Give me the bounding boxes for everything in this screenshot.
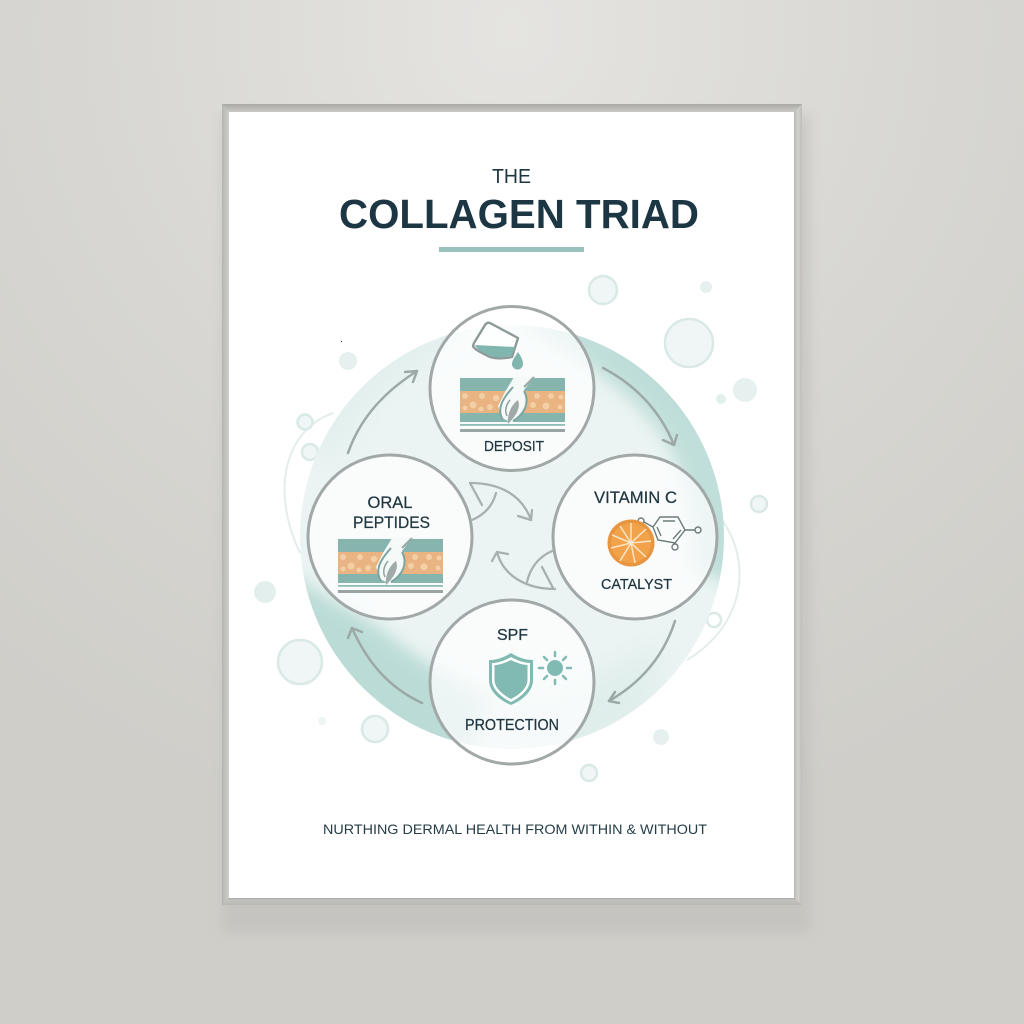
icon: molecule [638,517,701,550]
label: protection: PROTECTION [465,717,559,734]
icon: orange slice [608,520,654,566]
icon: skin cross-section [338,538,443,593]
node: spf [430,600,594,764]
title underline [439,247,584,252]
title: COLLAGEN TRIAD [339,191,699,237]
center arrows [470,483,555,589]
arrow: vitamin c to spf [609,621,675,703]
heading: the: THE [492,166,531,188]
poster scene [132,0,891,933]
label: oral peptides: ORAL [368,493,412,512]
icon: shield [489,653,533,705]
icon: pouring beaker [473,323,523,370]
node: deposit [430,306,594,470]
icon: skin cross-section [460,377,565,432]
speck [341,341,342,342]
arrow: spf to oral peptides [348,628,422,703]
outer cycle arrows [348,368,677,703]
poster frame [222,104,802,905]
label: deposit: DEPOSIT [484,438,544,455]
node: oral peptides [308,455,472,619]
footer tagline: NURTHING DERMAL HEALTH FROM WITHIN & WITHOUT [323,821,707,837]
icon: sun [539,652,571,684]
label: spf: SPF [497,627,528,644]
decorative bubbles [254,276,767,781]
watercolor background circle [300,326,724,748]
node: vitamin c [553,455,717,619]
label: oral peptides: PEPTIDES [353,513,430,532]
arrow: oral peptides to deposit [348,371,417,453]
arrow: center upper [470,483,532,520]
label: catalyst: CATALYST [601,576,672,593]
arrow: deposit to vitamin c [603,368,677,445]
label: vitamin c: VITAMIN C [594,488,677,507]
poster shadow [222,115,810,933]
thin halo arcs [285,413,740,660]
arrow: center lower [492,551,555,589]
